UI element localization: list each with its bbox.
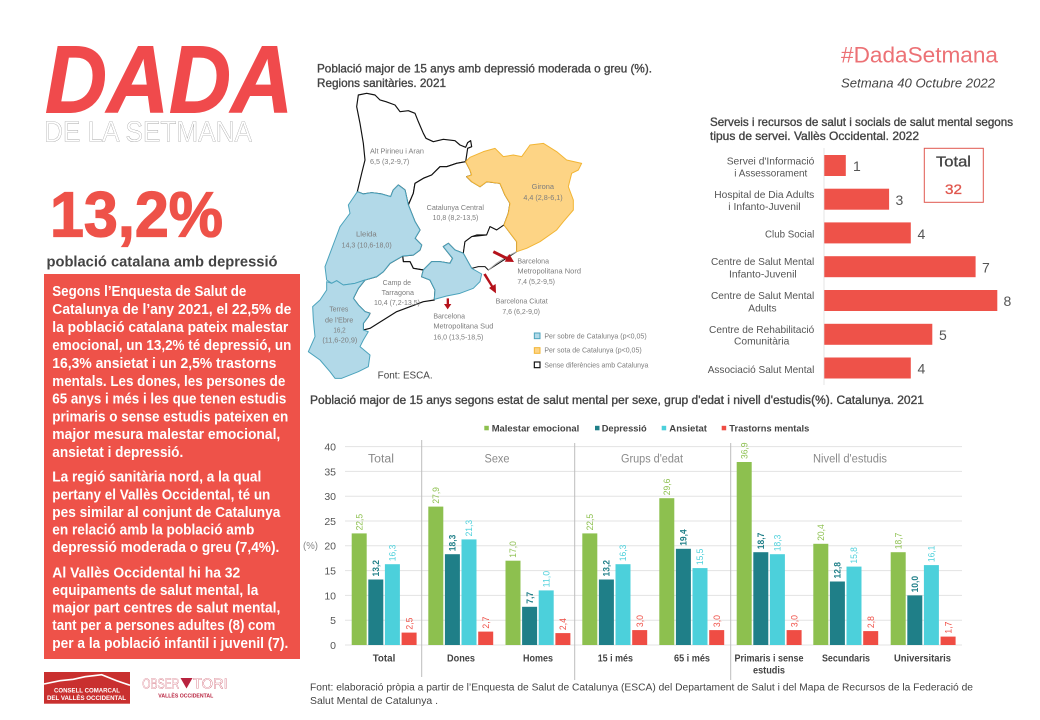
region labels: Tarragona xyxy=(382,288,415,297)
service labels xyxy=(708,155,815,376)
service labels: Infanto-Juvenil xyxy=(729,268,797,280)
bars: Total: 2,5 xyxy=(404,618,415,630)
bars: 65 i més: 29,6 xyxy=(662,479,673,495)
service labels: Centre de Salut Mental xyxy=(711,256,814,268)
region: Catalunya Central xyxy=(403,162,510,270)
logo: Observatori: TORI xyxy=(193,676,228,692)
bars: Secundaris: 12,8 xyxy=(833,562,844,578)
region labels: Girona xyxy=(532,182,555,191)
source note: Salut Mental de Catalunya . xyxy=(310,696,438,707)
region: Terres de l'Ebre xyxy=(308,280,370,378)
hashtag and date: Setmana 40 Octubre 2022 xyxy=(841,76,996,90)
logo: Consell Comarcal: CONSELL COMARCAL xyxy=(54,688,120,695)
y axis: 5 xyxy=(330,615,336,627)
paragraph: facilities: major part centres de salut mental, xyxy=(52,600,280,616)
title: DE LA SETMANA xyxy=(44,117,253,149)
region labels: Lleida xyxy=(356,230,377,239)
y axis: 20 xyxy=(324,541,336,553)
category labels: Homes xyxy=(523,654,553,665)
bars: Universitaris: 16,1 xyxy=(927,546,938,562)
bars: 15 i més: 22,5 xyxy=(585,514,596,530)
bars: Homes xyxy=(506,541,570,645)
paragraph: health region: pes similar al conjunt de Catalunya xyxy=(52,505,281,521)
service labels: Associació Salut Mental xyxy=(708,364,814,376)
bars: Dones: 2,7 xyxy=(481,617,492,629)
bars: 15 i més: 3,0 xyxy=(635,615,646,627)
bars: Homes: 2,4 xyxy=(558,618,569,630)
paragraph: facilities: Al Vallès Occidental hi ha 32 xyxy=(52,566,240,582)
panel: summary text xyxy=(44,274,300,659)
key figure: població catalana amb depressió xyxy=(46,254,278,271)
paragraph: prevalence: Segons l’Enquesta de Salut de xyxy=(52,284,246,300)
region: Lleida xyxy=(325,185,422,285)
logo: Consell Comarcal xyxy=(44,672,130,704)
region: Barcelona Metropolitana Nord xyxy=(463,225,517,270)
region labels: Catalunya Central xyxy=(427,203,484,212)
bars: 65 i més: 15,5 xyxy=(695,549,706,565)
paragraph: facilities: per a la població infantil i juvenil (7). xyxy=(52,636,288,652)
y axis: 10 xyxy=(324,590,336,602)
chart legend: Trastorns mentals xyxy=(729,423,809,434)
values: 8 xyxy=(1004,293,1012,309)
chart legend xyxy=(484,423,809,434)
service labels: Servei d'Informació xyxy=(727,155,815,167)
bar chart: services xyxy=(708,148,1012,385)
grouped bar chart xyxy=(303,440,962,680)
region labels: Barcelona xyxy=(433,311,466,320)
paragraph: health region: pertany el Vallès Occidental, té un xyxy=(52,487,270,503)
hashtag and date xyxy=(841,43,999,90)
chart legend: Ansietat xyxy=(669,423,708,434)
region labels: (11,6-20,9) xyxy=(322,336,358,345)
service labels: Centre de Salut Mental xyxy=(711,290,814,302)
group headings xyxy=(368,454,887,466)
region labels: 14,3 (10,6-18,0) xyxy=(342,240,392,249)
bars: Homes: 17,0 xyxy=(508,541,519,558)
bars: 65 i més: 19,4 xyxy=(679,529,690,546)
service labels: Comunitària xyxy=(734,336,789,348)
region labels: 16,0 (13,5-18,5) xyxy=(433,332,484,341)
paragraph: health region: en relació amb la població amb xyxy=(52,522,254,538)
bars: Homes: 7,7 xyxy=(525,592,536,604)
bars: Total xyxy=(352,514,417,645)
map legend: Per sobre de Catalunya (p<0,05) xyxy=(544,332,647,341)
y axis: 0 xyxy=(330,640,336,652)
paragraph: facilities xyxy=(52,566,288,652)
grouped chart heading: Població major de 15 anys segons estat de salut mental per sexe, grup d'edat i nivell d'estudis(%). Catalunya. 2021 xyxy=(310,395,924,407)
region labels: Metropolitana Nord xyxy=(517,266,581,275)
y axis: 35 xyxy=(324,466,336,478)
bars: Primaris i sense estudis: 3,0 xyxy=(789,615,800,627)
logo: Consell Comarcal: DEL VALLÈS OCCIDENTAL xyxy=(47,693,126,702)
paragraph: health region: depressió moderada o greu (7,4%). xyxy=(52,540,279,556)
bars: Total: 22,5 xyxy=(354,514,365,530)
region: Barcelona Metropolitana Sud xyxy=(422,243,482,299)
region labels: Alt Pirineu i Aran xyxy=(370,146,424,155)
region labels: 7,6 (6,2-9,0) xyxy=(502,307,540,316)
values: 4 xyxy=(918,360,926,376)
values: 5 xyxy=(939,327,947,343)
paragraph: health region xyxy=(52,470,281,556)
services heading: Serveis i recursos de salut i socials de salut mental segons xyxy=(710,115,1013,129)
source note xyxy=(310,683,973,707)
y axis: 40 xyxy=(324,442,336,454)
map source: Font: ESCA. xyxy=(378,370,433,381)
callout: total services: Total xyxy=(936,155,971,171)
paragraph: facilities: tant per a persones adultes (8) com xyxy=(52,618,275,634)
region labels: 16,2 xyxy=(333,326,346,335)
bars: Total: 16,3 xyxy=(388,545,399,561)
group headings: Nivell d'estudis xyxy=(813,454,887,466)
bars: Dones: 21,3 xyxy=(464,520,475,536)
region labels: 6,5 (3,2-9,7) xyxy=(370,157,410,166)
bars: Universitaris: 1,7 xyxy=(943,622,954,634)
services heading xyxy=(710,115,1013,143)
callout: total services xyxy=(924,148,983,202)
chart legend: Depressió xyxy=(602,423,647,434)
bars: Secundaris xyxy=(813,524,878,645)
paragraph: prevalence: 65 anys i més i les que tenen estudis xyxy=(52,392,286,408)
group dividers xyxy=(422,440,731,680)
map legend: Sense diferències amb Catalunya xyxy=(544,360,649,369)
service labels: Centre de Rehabilitació xyxy=(709,324,814,336)
paragraph: prevalence xyxy=(52,284,291,461)
category labels: 15 i més xyxy=(598,654,633,665)
bars: Primaris i sense estudis: 36,9 xyxy=(739,442,750,459)
group headings: Sexe xyxy=(484,454,510,466)
region labels: Barcelona xyxy=(517,256,550,265)
category labels: Total xyxy=(373,654,396,665)
category labels xyxy=(373,654,951,676)
y axis xyxy=(303,442,336,652)
region labels: Metropolitana Sud xyxy=(433,322,493,331)
region: Girona xyxy=(466,143,582,252)
bars: 15 i més xyxy=(582,514,647,645)
values: 3 xyxy=(896,192,904,208)
map heading: Regions sanitàries. 2021 xyxy=(317,76,446,90)
bars: 65 i més: 3,0 xyxy=(712,615,723,627)
services heading: tipus de servei. Vallès Occidental. 2022 xyxy=(710,129,919,143)
paragraph: prevalence: emocional, un 13,2% té depressió, un xyxy=(52,338,291,354)
key figure: 13,2% xyxy=(50,179,223,251)
map legend xyxy=(534,332,649,369)
paragraph: health region: La regió sanitària nord, a la qual xyxy=(52,470,261,486)
category labels: 65 i més xyxy=(674,654,710,665)
bars: 15 i més: 16,3 xyxy=(618,545,629,561)
map legend: Per sota de Catalunya (p<0,05) xyxy=(544,346,642,355)
chart legend: Malestar emocional xyxy=(492,423,579,434)
paragraph: prevalence: la població catalana pateix malestar xyxy=(52,320,289,336)
region labels: 10,8 (8,2-13,5) xyxy=(433,213,479,222)
bars: Universitaris xyxy=(891,533,956,645)
category labels: Primaris i sense xyxy=(734,654,804,665)
service labels: Adults xyxy=(748,302,777,314)
bars: Primaris i sense estudis xyxy=(737,442,802,645)
bars: Primaris i sense estudis: 18,7 xyxy=(756,533,767,549)
bars: Dones: 18,3 xyxy=(448,535,459,551)
region: Camp de Tarragona xyxy=(353,256,435,330)
paragraph: prevalence: major mesura malestar emocional, xyxy=(52,427,280,443)
paragraph: prevalence: mentals. Les dones, les persones de xyxy=(52,374,285,390)
map of health regions xyxy=(308,93,649,381)
bars: Universitaris: 10,0 xyxy=(910,576,921,592)
region labels: 10,4 (7,2-13,5) xyxy=(374,298,420,307)
y axis: 25 xyxy=(324,516,336,528)
service labels: Hospital de Dia Adults xyxy=(714,189,814,201)
hashtag and date: #DadaSetmana xyxy=(841,43,999,68)
paragraph: prevalence: primaris o sense estudis pateixen en xyxy=(52,410,288,426)
paragraph: prevalence: 16,3% ansietat i un 2,5% trastorns xyxy=(52,356,276,372)
logo: Observatori xyxy=(142,676,228,699)
bars: Universitaris: 18,7 xyxy=(893,533,904,549)
region labels: Camp de xyxy=(383,278,411,287)
service labels: i Assessorament xyxy=(734,168,807,180)
y axis: 15 xyxy=(324,566,336,578)
bars: Primaris i sense estudis: 18,3 xyxy=(773,535,784,551)
region labels: Barcelona Ciutat xyxy=(496,296,548,305)
region labels: Terres xyxy=(329,305,348,314)
bars: 15 i més: 13,2 xyxy=(602,560,613,576)
bars: Total: 13,2 xyxy=(371,560,382,576)
paragraph: prevalence: Catalunya de l’any 2021, el 22,5% de xyxy=(52,302,291,318)
bars xyxy=(824,155,997,378)
region: Alt Pirineu i Aran xyxy=(357,93,472,205)
map heading: Població major de 15 anys amb depressió moderada o greu (%). xyxy=(317,62,652,76)
key figure xyxy=(46,179,278,271)
paragraph: facilities: equipaments de salut mental, la xyxy=(52,583,259,599)
y axis: (%) xyxy=(303,541,318,552)
bars: Homes: 11,0 xyxy=(541,571,552,587)
region labels: 4,4 (2,8-6,1) xyxy=(523,193,563,202)
service labels: i Infanto-Juvenil xyxy=(728,201,801,213)
region labels: 7,4 (5,2-9,5) xyxy=(517,277,555,286)
bars: Secundaris: 20,4 xyxy=(816,524,827,541)
values: 1 xyxy=(853,158,861,174)
logo: Observatori: OBSER xyxy=(142,676,179,692)
region labels: de l'Ebre xyxy=(325,316,353,325)
values: 4 xyxy=(918,226,926,242)
source note: Font: elaboració pròpia a partir de l’Enquesta de Salut de Catalunya (ESCA) del Departament de Salut i del Mapa de Recursos de la Federació de xyxy=(310,683,973,694)
bars: Secundaris: 15,8 xyxy=(849,547,860,564)
bars: Secundaris: 2,8 xyxy=(866,616,877,628)
paragraph: prevalence: ansietat i depressió. xyxy=(52,445,183,461)
map heading xyxy=(317,62,652,90)
category labels: Universitaris xyxy=(894,654,951,665)
category labels: Dones xyxy=(447,654,475,665)
group headings: Total xyxy=(368,454,394,466)
bars: Dones: 27,9 xyxy=(431,487,442,504)
y axis: 30 xyxy=(324,491,336,503)
category labels: Secundaris xyxy=(822,654,870,665)
values xyxy=(853,158,1012,376)
service labels: Club Social xyxy=(765,229,814,241)
bars: 65 i més xyxy=(659,479,724,645)
logo: Observatori: VALLÈS OCCIDENTAL xyxy=(158,691,214,699)
category labels: estudis xyxy=(753,666,785,676)
group headings: Grups d'edat xyxy=(621,454,684,466)
bars: Dones xyxy=(428,487,493,645)
callout: total services: 32 xyxy=(945,181,962,197)
values: 7 xyxy=(982,260,990,276)
region labels xyxy=(322,146,581,345)
title: DADA xyxy=(45,26,293,134)
arrows to Barcelona regions xyxy=(444,250,514,309)
